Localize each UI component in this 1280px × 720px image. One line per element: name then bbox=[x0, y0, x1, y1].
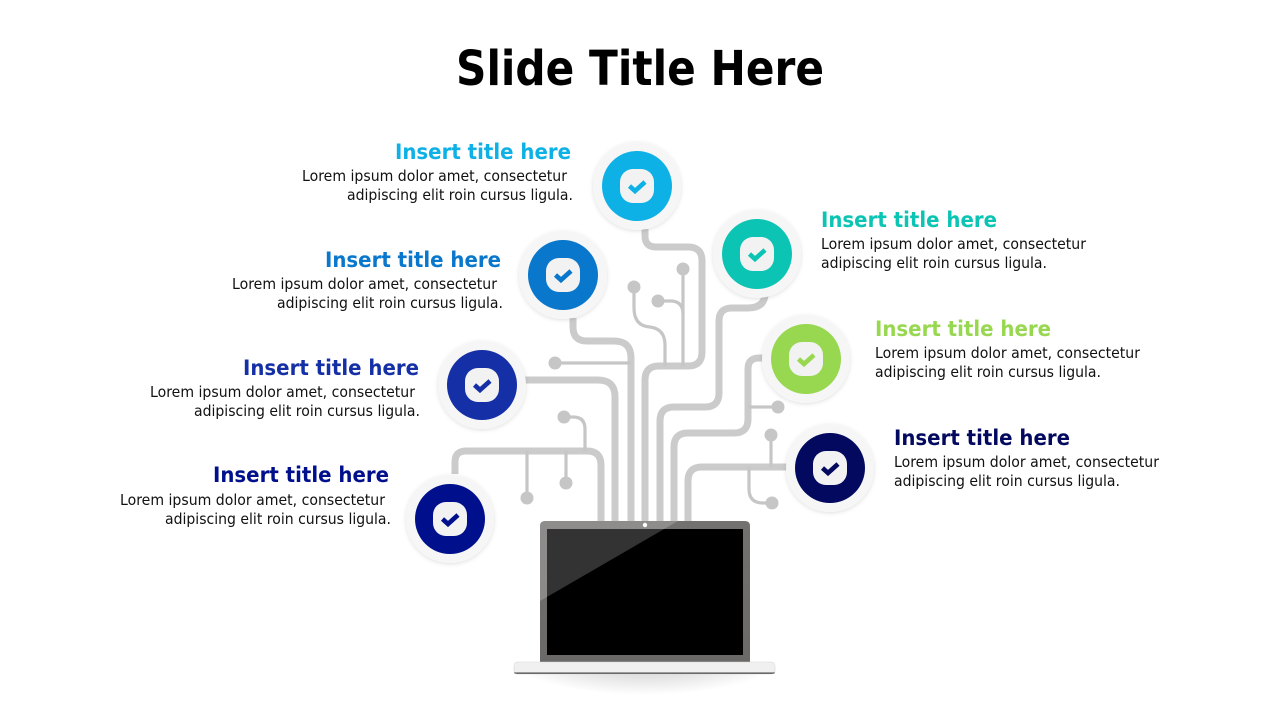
circuit wires bbox=[455, 229, 787, 521]
body text bbox=[875, 344, 1141, 381]
screen glare bbox=[540, 521, 678, 601]
heading: Insert title here bbox=[894, 426, 1070, 450]
icon: check badge bbox=[438, 341, 526, 429]
body text: adipiscing elit roin cursus ligula. bbox=[165, 510, 391, 528]
node: right three bbox=[766, 496, 778, 510]
body text: adipiscing elit roin cursus ligula. bbox=[875, 363, 1101, 381]
laptop screen bbox=[547, 529, 743, 655]
thin branch: right one bbox=[748, 405, 778, 409]
laptop lid bbox=[540, 521, 750, 663]
icon: check badge bbox=[786, 424, 874, 512]
laptop base bbox=[514, 662, 775, 674]
wire: item 2 to laptop bbox=[573, 318, 631, 521]
thin branch: lower left two bbox=[564, 451, 568, 483]
body text bbox=[150, 383, 420, 420]
title: Slide Title Here bbox=[456, 41, 824, 97]
icon: check badge bbox=[593, 142, 681, 230]
body text bbox=[232, 275, 503, 312]
body text: adipiscing elit roin cursus ligula. bbox=[194, 402, 420, 420]
node: left hook bbox=[558, 410, 570, 424]
laptop shadow bbox=[515, 653, 775, 695]
thin branch: center straight bbox=[681, 269, 685, 366]
node: right two bbox=[764, 428, 778, 442]
node: center straight bbox=[676, 262, 690, 276]
icon: check badge bbox=[762, 315, 850, 403]
node: center hook bbox=[652, 294, 664, 308]
icon: check badge bbox=[519, 231, 607, 319]
wire: item 7 to laptop bbox=[688, 467, 787, 521]
body text bbox=[302, 167, 573, 204]
body text: Lorem ipsum dolor amet, consectetur bbox=[150, 383, 416, 401]
body text: Lorem ipsum dolor amet, consectetur bbox=[894, 453, 1160, 471]
webcam bbox=[643, 523, 647, 527]
thin branch: left upper bbox=[555, 361, 631, 365]
node: center curve bbox=[628, 280, 640, 294]
base edge bbox=[514, 672, 775, 674]
heading: Insert title here bbox=[213, 463, 389, 487]
body text: Lorem ipsum dolor amet, consectetur bbox=[120, 491, 386, 509]
item 1: light blue bbox=[302, 140, 681, 230]
heading: Insert title here bbox=[325, 248, 501, 272]
body text: adipiscing elit roin cursus ligula. bbox=[821, 254, 1047, 272]
heading: Insert title here bbox=[821, 208, 997, 232]
item 3: royal blue bbox=[150, 341, 526, 429]
laptop bbox=[514, 521, 775, 695]
item 5: teal bbox=[713, 208, 1087, 298]
thin branch: right three bbox=[749, 467, 772, 503]
body text bbox=[821, 235, 1087, 272]
item 6: green bbox=[762, 315, 1141, 403]
body text: Lorem ipsum dolor amet, consectetur bbox=[821, 235, 1087, 253]
heading: Insert title here bbox=[395, 140, 571, 164]
icon: check badge bbox=[713, 210, 801, 298]
node: lower left one bbox=[520, 492, 534, 504]
icon: check badge bbox=[406, 475, 494, 563]
wire: item 6 to laptop bbox=[674, 358, 763, 521]
body text bbox=[894, 453, 1160, 490]
thin branch: center hook bbox=[658, 301, 683, 314]
thin branch: center curve bbox=[634, 287, 665, 366]
thin branch: lower left one bbox=[525, 451, 529, 498]
body text: Lorem ipsum dolor amet, consectetur bbox=[875, 344, 1141, 362]
item 2: blue bbox=[232, 231, 607, 319]
body text: Lorem ipsum dolor amet, consectetur bbox=[302, 167, 568, 185]
wire: item 5 to laptop bbox=[660, 296, 765, 521]
thin branch: right two bbox=[769, 435, 773, 467]
heading: Insert title here bbox=[243, 356, 419, 380]
body text bbox=[120, 491, 391, 528]
wire: item 4 to laptop bbox=[455, 451, 601, 521]
heading: Insert title here bbox=[875, 317, 1051, 341]
wire: item 3 to laptop bbox=[524, 380, 615, 521]
item 4: dark blue bbox=[120, 463, 494, 563]
body text: adipiscing elit roin cursus ligula. bbox=[277, 294, 503, 312]
item 7: navy bbox=[786, 424, 1160, 512]
body text: adipiscing elit roin cursus ligula. bbox=[347, 186, 573, 204]
body text: Lorem ipsum dolor amet, consectetur bbox=[232, 275, 498, 293]
thin branch: left hook bbox=[564, 417, 585, 451]
node: left upper bbox=[548, 356, 562, 370]
node: lower left two bbox=[560, 476, 572, 490]
body text: adipiscing elit roin cursus ligula. bbox=[894, 472, 1120, 490]
node: right one bbox=[772, 400, 784, 414]
wire: item 1 to laptop bbox=[645, 229, 702, 521]
